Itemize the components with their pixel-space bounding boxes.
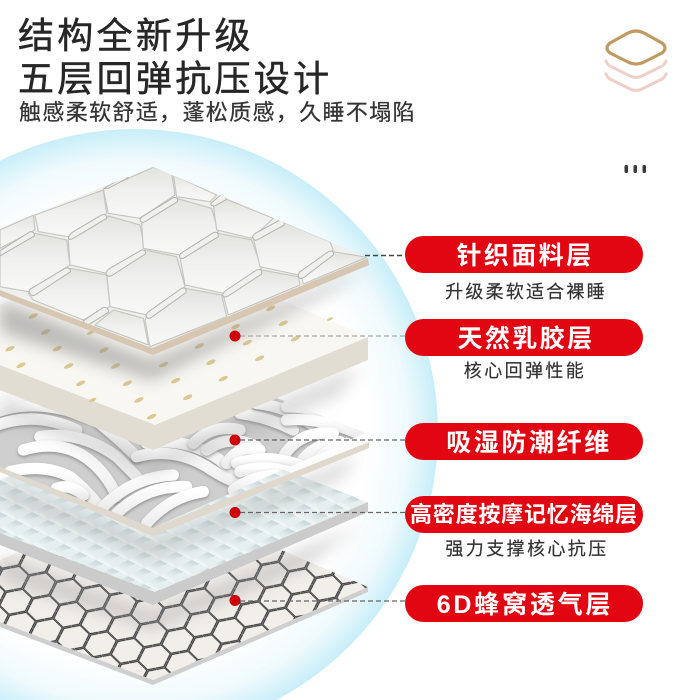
callout leader lines (240, 256, 405, 601)
label: moisture fibre (405, 423, 643, 460)
latex holes (5, 304, 334, 421)
caption: knit fabric: 升级柔软适合裸睡 (445, 282, 607, 302)
marker dots (230, 330, 240, 606)
layer 3: woven fibre (0, 386, 369, 536)
subtitle: 触感柔软舒适，蓬松质感，久睡不塌陷 (19, 100, 416, 125)
strands (0, 400, 362, 523)
shadow under layer 4 (0, 525, 360, 630)
label: knit fabric: 针织面料层 (456, 242, 594, 270)
label: memory foam (405, 496, 643, 533)
icon: layers (606, 31, 666, 90)
background circle (0, 129, 438, 700)
quilted hexagons (0, 167, 367, 347)
layer 2: latex (0, 245, 368, 450)
label: latex: 天然乳胶层 (457, 325, 595, 353)
label: honeycomb: 6D蜂窝透气层 (437, 590, 613, 619)
shadow under layer 2 (0, 365, 360, 475)
shadow under layer 3 (0, 455, 360, 560)
label: knit fabric (405, 236, 643, 273)
shadow under layer 1 (0, 268, 368, 380)
grooves (0, 177, 333, 324)
caption: memory foam: 强力支撑核心抗压 (445, 539, 609, 559)
label: honeycomb (405, 585, 643, 622)
layer 5: honeycomb (0, 495, 368, 685)
label: moisture fibre: 吸湿防潮纤维 (446, 429, 612, 457)
layer 1: knit fabric (0, 167, 369, 355)
label: latex (405, 319, 643, 356)
title second line: 五层回弹抗压设计 (18, 58, 332, 99)
title: 结构全新升级 (18, 15, 254, 56)
label: memory foam: 高密度按摩记忆海绵层 (410, 502, 638, 527)
icon: more dots (624, 165, 646, 173)
layer 4: memory foam (0, 420, 368, 605)
caption: latex: 核心回弹性能 (464, 361, 586, 381)
